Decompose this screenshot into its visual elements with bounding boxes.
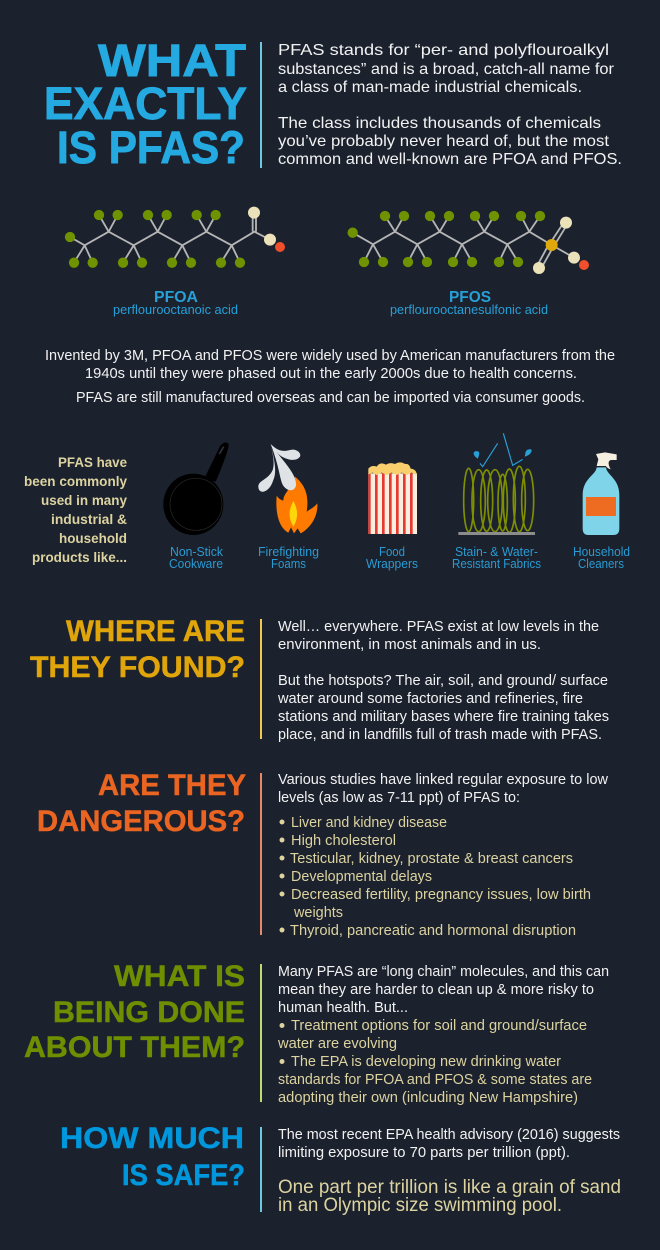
list: health effects: Liver and kidney disease	[291, 815, 447, 831]
label: fabrics: Resistant Fabrics	[452, 556, 541, 571]
history paragraph	[45, 348, 615, 406]
heading: are they dangerous	[37, 769, 246, 838]
text: exposure intro	[278, 772, 608, 806]
list: actions under way: The EPA is developing new drinking water	[291, 1054, 561, 1070]
list: health effects: Developmental delays	[291, 869, 432, 885]
label: cookware: Non-Stick	[170, 544, 223, 559]
molecule: PFOS	[347, 211, 589, 274]
list: actions under way: water are evolving	[277, 1036, 397, 1052]
heading: what is being done: BEING DONE	[53, 996, 245, 1029]
PFOS label	[390, 289, 548, 317]
callout: grain of sand comparison	[278, 1177, 621, 1216]
heading: are they dangerous: DANGEROUS?	[37, 805, 245, 838]
list: actions under way	[277, 1018, 592, 1106]
history paragraph: PFAS are still manufactured overseas and can be imported via consumer goods.	[76, 390, 585, 406]
section: what is being done	[24, 960, 609, 1106]
PFOA label	[113, 289, 238, 317]
list: health effects: High cholesterol	[291, 833, 396, 849]
text: where are they found: Well… everywhere. PFAS exist at low levels in the	[278, 619, 599, 635]
heading: where are they found: WHERE ARE	[66, 615, 245, 648]
PFOA label: perflourooctanoic acid	[113, 303, 238, 317]
heading: what is being done: ABOUT THEM?	[24, 1031, 245, 1064]
heading: where are they found	[30, 615, 245, 684]
intro text: The class includes thousands of chemicals	[278, 115, 601, 132]
list: health effects: Decreased fertility, pregnancy issues, low birth	[291, 887, 591, 903]
intro text: a class of man-made industrial chemicals.	[278, 79, 582, 96]
title: IS PFAS?	[57, 122, 245, 173]
text: long chain molecules: Many PFAS are “long chain” molecules, and this can	[278, 964, 609, 980]
text: where are they found: water around some factories and refineries, fire	[277, 691, 583, 707]
intro text: you’ve probably never heard of, but the most	[278, 133, 610, 150]
heading: what is being done: WHAT IS	[114, 960, 245, 993]
list: actions under way: standards for PFOA and PFOS & some states are	[278, 1072, 592, 1088]
label: cleaners: Cleaners	[578, 556, 624, 571]
list: health effects: Testicular, kidney, prostate & breast cancers	[290, 851, 573, 867]
molecule: PFOA	[65, 207, 285, 268]
text: where are they found: stations and military bases where fire training takes	[278, 709, 609, 725]
label: wrappers: Wrappers	[366, 556, 418, 571]
section: are they dangerous	[37, 769, 608, 939]
text: long chain molecules: mean they are harder to clean up & more risky to	[278, 982, 594, 998]
text: exposure intro: levels (as low as 7-11 ppt) of PFAS to:	[278, 790, 520, 806]
list: actions under way: adopting their own (inlcuding New Hampshire)	[278, 1090, 578, 1106]
section: where are they found	[30, 615, 609, 743]
icon: popcorn box	[368, 462, 417, 534]
products intro text: industrial &	[51, 512, 127, 527]
list: health effects: weights	[293, 905, 343, 921]
label: foams: Foams	[271, 556, 306, 571]
label: cookware	[169, 544, 223, 571]
title	[44, 35, 247, 173]
text: EPA advisory: The most recent EPA health advisory (2016) suggests	[278, 1127, 620, 1143]
label: cleaners: Household	[573, 544, 630, 559]
label: wrappers	[366, 544, 418, 571]
heading: how much is safe	[60, 1122, 245, 1192]
list: health effects	[280, 815, 591, 939]
products intro text: products like...	[32, 550, 127, 565]
text: EPA advisory: limiting exposure to 70 parts per trillion (ppt).	[278, 1145, 570, 1161]
intro text: PFAS stands for “per- and polyflouroalkyl	[278, 42, 609, 59]
label: cookware: Cookware	[169, 556, 223, 571]
label: foams: Firefighting	[258, 544, 319, 559]
icon: frying pan	[163, 442, 229, 535]
text: where are they found: But the hotspots? The air, soil, and ground/ surface	[278, 673, 608, 689]
heading: what is being done	[24, 960, 245, 1064]
heading: are they dangerous: ARE THEY	[98, 769, 246, 802]
label: fabrics: Stain- & Water-	[455, 544, 538, 559]
label: cleaners	[573, 544, 630, 571]
callout: grain of sand comparison: One part per trillion is like a grain of sand	[278, 1177, 621, 1198]
history paragraph: Invented by 3M, PFOA and PFOS were widely used by American manufacturers from the	[45, 348, 615, 364]
products intro text: household	[59, 531, 127, 546]
history paragraph: 1940s until they were phased out in the early 2000s due to health concerns.	[85, 366, 577, 382]
text: where are they found: environment, in most animals and in us.	[278, 637, 541, 653]
label: wrappers: Food	[379, 544, 405, 559]
products intro text	[24, 455, 127, 565]
label: foams	[258, 544, 319, 571]
label: fabrics	[452, 544, 541, 571]
icon: water-resistant fabric	[458, 433, 535, 535]
PFOA label: PFOA	[154, 289, 198, 306]
heading: how much is safe: IS SAFE?	[122, 1159, 245, 1192]
products intro text: PFAS have	[58, 455, 127, 470]
text: long chain molecules: human health. But...	[278, 1000, 408, 1016]
intro text: common and well-known are PFOA and PFOS.	[278, 151, 622, 168]
icon: cleaner spray bottle	[583, 452, 619, 535]
section: how much is safe	[60, 1122, 621, 1216]
text: EPA advisory	[278, 1127, 620, 1161]
list: health effects: Thyroid, pancreatic and hormonal disruption	[290, 923, 576, 939]
PFOS label: perflourooctanesulfonic acid	[390, 303, 548, 317]
title: EXACTLY	[44, 78, 247, 129]
heading: how much is safe: HOW MUCH	[60, 1122, 244, 1155]
products intro text: been commonly	[24, 474, 127, 489]
text: exposure intro: Various studies have linked regular exposure to low	[278, 772, 608, 788]
text: long chain molecules	[278, 964, 609, 1016]
intro text: substances” and is a broad, catch-all name for	[278, 61, 615, 78]
title: WHAT	[98, 35, 246, 86]
icon: flame and foam	[258, 444, 317, 533]
products intro text: used in many	[41, 493, 127, 508]
callout: grain of sand comparison: in an Olympic size swimming pool.	[278, 1195, 562, 1216]
intro text	[278, 42, 622, 168]
text: where are they found: place, and in landfills full of trash made with PFAS.	[278, 727, 602, 743]
text: where are they found	[277, 619, 609, 743]
PFOS label: PFOS	[449, 289, 491, 306]
heading: where are they found: THEY FOUND?	[30, 651, 245, 684]
list: actions under way: Treatment options for soil and ground/surface	[291, 1018, 587, 1034]
